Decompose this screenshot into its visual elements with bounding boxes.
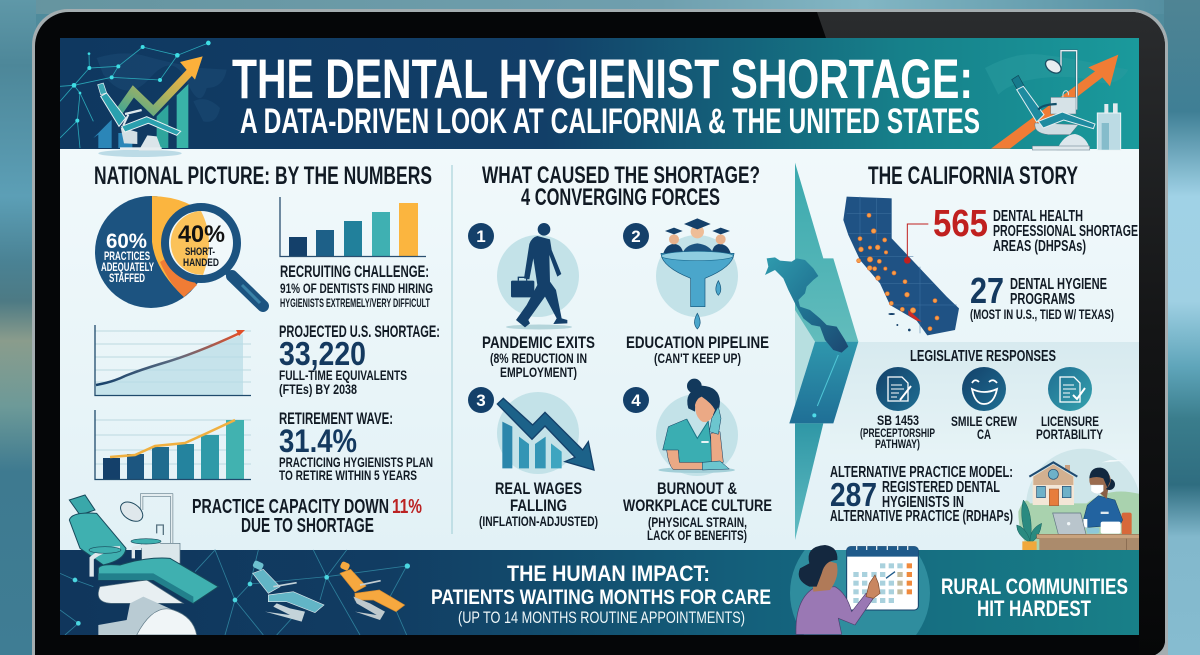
icon: Smile Crew CA smile	[962, 367, 1006, 411]
text: retirement wave	[279, 410, 433, 483]
cause 3: real wages falling: 3	[476, 391, 486, 410]
text: projected shortage: 33,220	[279, 335, 366, 372]
bar chart: recruiting challenge	[280, 197, 426, 256]
stat: 27 programs	[970, 278, 1114, 322]
icon: header right chair and rising arrow	[985, 51, 1128, 150]
cause 1 label	[482, 333, 595, 380]
text: SB 1453: PATHWAY)	[875, 437, 920, 451]
text: retirement wave: PRACTICING HYGIENISTS PLAN	[279, 454, 433, 470]
stat: 27 programs: 27	[970, 270, 1004, 311]
panel: legislative band background	[840, 342, 1139, 405]
cause 4 label: (PHYSICAL STRAIN,	[648, 514, 747, 530]
text: recruiting challenge: HYGIENISTS EXTREMELY/VERY DIFFICULT	[280, 296, 430, 310]
content background	[60, 149, 1139, 551]
text: projected shortage: PROJECTED U.S. SHORTAGE:	[279, 323, 440, 341]
text: projected shortage	[279, 323, 440, 397]
text: projected shortage: (FTEs) BY 2038	[279, 381, 357, 397]
pie chart: 60 percent staffed, 40 percent short-handed: 60%	[106, 230, 147, 253]
panel: the California story	[830, 162, 1143, 563]
icon: small blue dental chair	[252, 560, 324, 622]
icon: magnifying glass with 40 percent: 40%	[178, 221, 225, 248]
header banner	[60, 38, 1139, 149]
arrow: chevron with US west map	[765, 163, 858, 540]
icon: small orange dental chair	[340, 561, 405, 620]
icon: header left chair and rising arrow	[60, 41, 227, 157]
cause 4: burnout: 4	[631, 391, 641, 410]
text: alternative practice model	[830, 464, 1013, 525]
text: alternative practice model: ALTERNATIVE PRACTICE MODEL:	[830, 464, 1013, 481]
stat: 565 DHPSAs	[934, 210, 1138, 254]
heading: legislative responses: LEGISLATIVE RESPONSES	[910, 348, 1056, 365]
text: Smile Crew CA: SMILE CREW	[951, 414, 1017, 429]
heading: causes	[482, 166, 759, 205]
cause 3 label	[479, 479, 598, 529]
cause 3 label: REAL WAGES	[495, 479, 582, 498]
callout: practice capacity: PRACTICE CAPACITY DOWN	[192, 496, 389, 518]
text: SB 1453	[860, 413, 935, 451]
bar chart: retirement wave	[95, 410, 251, 480]
network pattern	[60, 550, 410, 635]
stat: 27 programs: DENTAL HYGIENE	[1010, 276, 1107, 293]
title	[232, 59, 980, 134]
text: SB 1453: SB 1453	[877, 413, 919, 428]
stat: 565 DHPSAs: AREAS (DHPSAs)	[993, 238, 1086, 255]
panel: legislative responses	[860, 348, 1103, 451]
heading: causes: 4 CONVERGING FORCES	[521, 184, 720, 211]
icon: licensure portability document	[1048, 367, 1092, 411]
stat: 27 programs: PROGRAMS	[1010, 291, 1075, 308]
cause 1: pandemic exits: 1	[476, 227, 486, 246]
text: rural communities: RURAL COMMUNITIES	[941, 574, 1128, 599]
cause 2 label: EDUCATION PIPELINE	[626, 333, 769, 352]
stat: 27 programs: (MOST IN U.S., TIED W/ TEXAS)	[970, 307, 1114, 322]
text: recruiting challenge	[280, 266, 432, 307]
text: alternative practice model: ALTERNATIVE PRACTICE (RDHAPs)	[830, 508, 1013, 525]
cause 4: burnout	[623, 379, 738, 476]
text: Smile Crew CA: CA	[977, 427, 991, 442]
text: human impact: (UP TO 14 MONTHS ROUTINE APPOINTMENTS)	[458, 608, 745, 627]
text: alternative practice model: 287	[830, 476, 877, 513]
stat: 565 DHPSAs: PROFESSIONAL SHORTAGE	[993, 223, 1138, 240]
icon: magnifying glass with 40 percent: SHORT-	[185, 246, 215, 258]
text: licensure portability	[1036, 414, 1103, 442]
text: retirement wave: TO RETIRE WITHIN 5 YEARS	[279, 467, 417, 483]
text: SB 1453: (PRECEPTORSHIP	[860, 426, 935, 440]
icon: SB 1453 document	[876, 367, 920, 411]
text: alternative practice model: REGISTERED DENTAL	[882, 479, 1000, 496]
icon: alternative practice scene	[1017, 449, 1143, 563]
callout: practice capacity: 11%	[392, 496, 422, 518]
text: licensure portability: LICENSURE	[1041, 414, 1099, 429]
cause 1: pandemic exits	[468, 223, 579, 330]
footer banner	[60, 550, 1139, 635]
map: California with shortage dots	[843, 197, 959, 335]
line chart: projected shortage	[95, 325, 251, 396]
cause 2 label: (CAN'T KEEP UP)	[654, 350, 741, 366]
text: retirement wave: RETIREMENT WAVE:	[279, 410, 393, 428]
text: human impact: PATIENTS WAITING MONTHS FOR CARE	[431, 585, 771, 609]
cause 4 label	[623, 479, 772, 543]
pie chart: 60 percent staffed, 40 percent short-handed: ADEQUATELY	[101, 262, 154, 274]
icon: magnifying glass with 40 percent	[165, 207, 263, 306]
text: human impact	[431, 561, 771, 627]
cause 2: education pipeline	[623, 218, 738, 329]
cause 3 label: (INFLATION-ADJUSTED)	[479, 513, 598, 529]
text: licensure portability: PORTABILITY	[1036, 427, 1103, 442]
cause 2 label	[626, 336, 768, 366]
pie chart: 60 percent staffed, 40 percent short-handed: STAFFED	[109, 273, 145, 285]
text: rural communities	[941, 574, 1128, 621]
text: rural communities: HIT HARDEST	[977, 596, 1091, 621]
stat: 565 DHPSAs: DENTAL HEALTH	[993, 208, 1083, 225]
stat: 565 DHPSAs: 565	[933, 203, 988, 245]
callout: practice capacity: DUE TO SHORTAGE	[241, 515, 374, 537]
pie chart: 60 percent staffed, 40 percent short-handed: PRACTICES	[104, 251, 150, 263]
pie chart: 60 percent staffed, 40 percent short-handed	[95, 196, 198, 308]
panel: causes of the shortage	[468, 162, 772, 543]
text: human impact: THE HUMAN IMPACT:	[507, 561, 710, 586]
text: recruiting challenge: 91% OF DENTISTS FIND HIRING	[280, 280, 433, 296]
text: recruiting challenge: RECRUITING CHALLENGE:	[280, 263, 429, 281]
icon: magnifying glass with 40 percent: HANDED	[183, 257, 219, 269]
icon: large teal dental chair	[69, 495, 218, 635]
panel: national picture	[94, 162, 440, 537]
cause 2: education pipeline: 2	[631, 227, 641, 246]
text: Smile Crew CA	[951, 414, 1017, 442]
cause 3 label: FALLING	[510, 496, 567, 515]
cause 4 label: LACK OF BENEFITS)	[647, 527, 747, 543]
heading: national picture: NATIONAL PICTURE: BY THE NUMBERS	[94, 162, 432, 190]
cause 4 label: WORKPLACE CULTURE	[623, 496, 772, 515]
callout: practice capacity	[192, 499, 422, 532]
text: alternative practice model: HYGIENISTS IN	[882, 494, 964, 511]
cause 3: real wages falling	[468, 387, 594, 474]
icon: woman marking calendar	[790, 523, 930, 655]
text: retirement wave: 31.4%	[279, 423, 357, 459]
heading: causes: WHAT CAUSED THE SHORTAGE?	[482, 162, 760, 189]
cause 1 label: (8% REDUCTION IN	[490, 350, 587, 366]
cause 1 label: PANDEMIC EXITS	[482, 333, 595, 352]
cause 1 label: EMPLOYMENT)	[500, 364, 577, 380]
heading: California story: THE CALIFORNIA STORY	[868, 162, 1078, 190]
cause 4 label: BURNOUT &	[657, 479, 737, 498]
text: projected shortage: FULL-TIME EQUIVALENTS	[279, 367, 407, 383]
